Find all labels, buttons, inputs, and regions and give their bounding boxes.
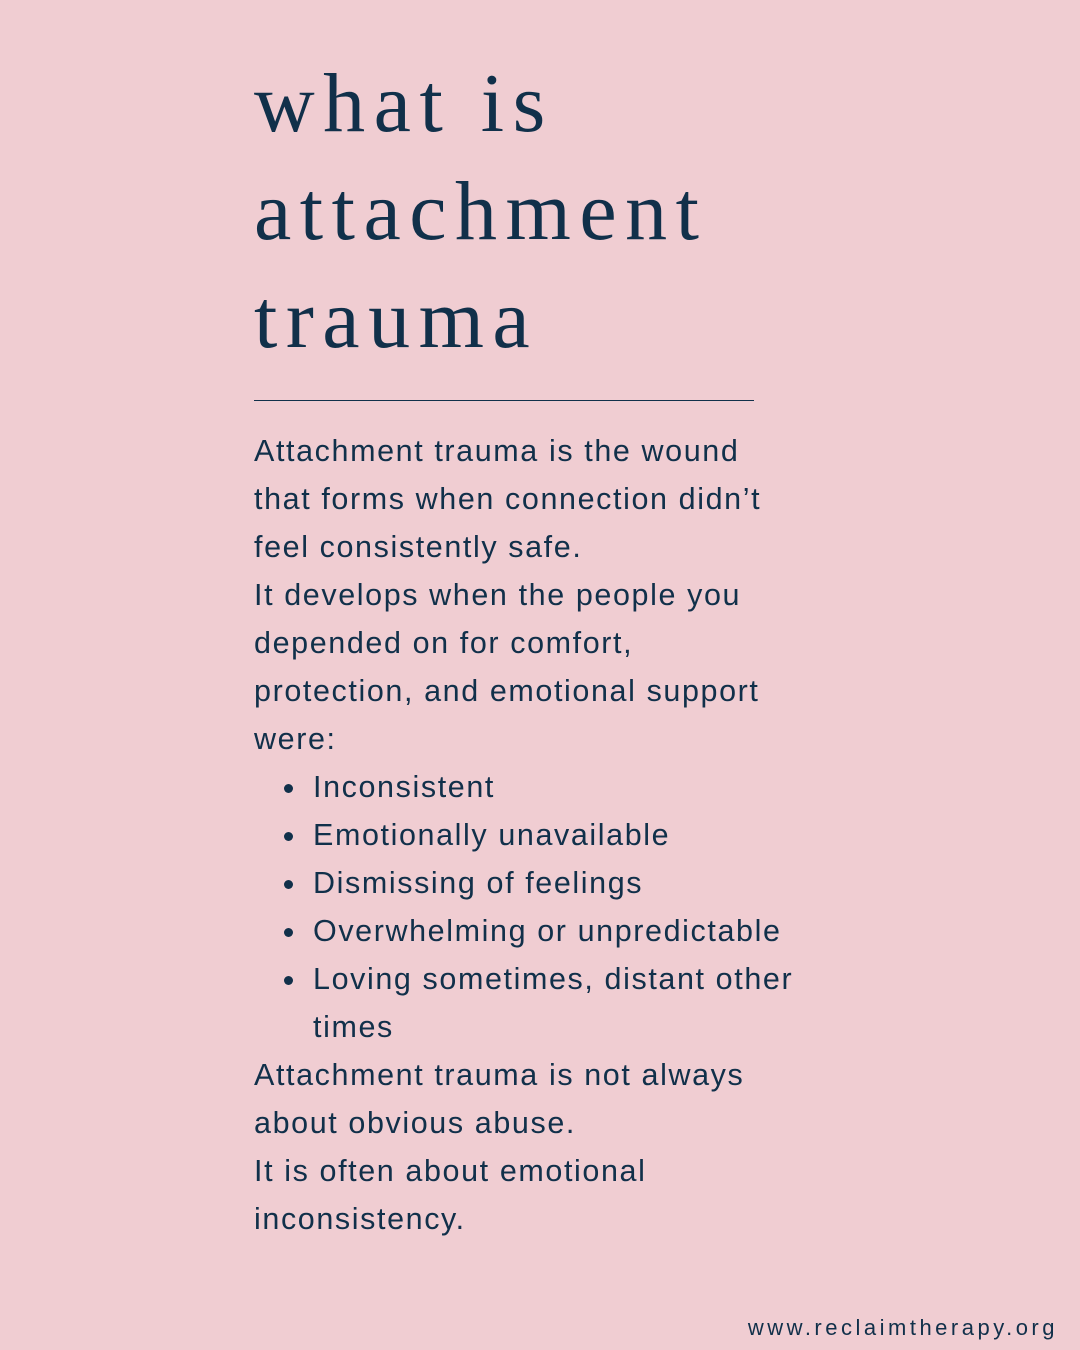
bullet list: Dismissing of feelings (313, 866, 643, 900)
intro paragraph: Attachment trauma is the wound (254, 434, 739, 468)
title: attachment (254, 165, 707, 258)
closing paragraph (254, 1058, 744, 1236)
bullet list: Overwhelming or unpredictable (313, 914, 782, 948)
intro paragraph: It develops when the people you (254, 578, 741, 612)
bullet list: Emotionally unavailable (313, 818, 670, 852)
intro paragraph: protection, and emotional support (254, 674, 760, 708)
closing paragraph: Attachment trauma is not always (254, 1058, 744, 1092)
intro paragraph: feel consistently safe. (254, 530, 582, 564)
closing paragraph: inconsistency. (254, 1202, 466, 1236)
title: trauma (254, 273, 538, 366)
title: what is (254, 57, 554, 150)
intro paragraph (254, 434, 761, 756)
intro paragraph: depended on for comfort, (254, 626, 633, 660)
footer url: www.reclaimtherapy.org (748, 1315, 1058, 1340)
title (254, 57, 707, 366)
bullet list (284, 770, 793, 1044)
body text (254, 434, 793, 1236)
bullet list: Inconsistent (313, 770, 495, 804)
intro paragraph: that forms when connection didn’t (254, 482, 761, 516)
closing paragraph: about obvious abuse. (254, 1106, 576, 1140)
bullet list: times (313, 1010, 394, 1044)
bullet list: Loving sometimes, distant other (313, 962, 793, 996)
intro paragraph: were: (254, 722, 337, 756)
closing paragraph: It is often about emotional (254, 1154, 646, 1188)
